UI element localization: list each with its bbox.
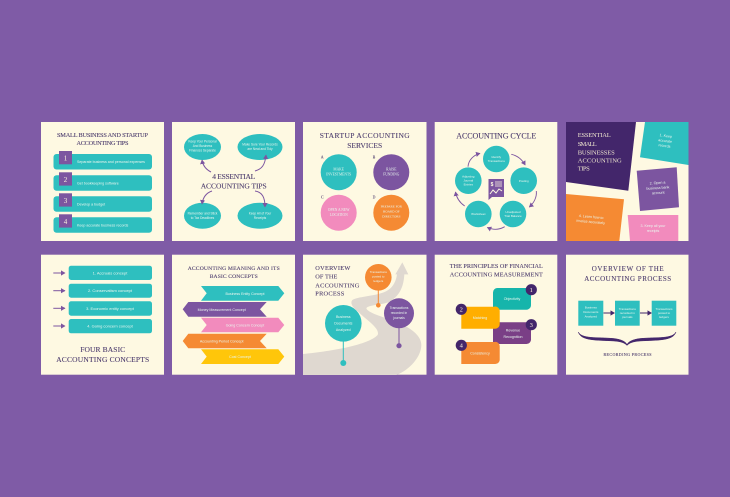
step: posting: Posting [519, 179, 529, 183]
principle 4: consistency: 4 [460, 343, 464, 350]
heading: overview process [584, 265, 671, 283]
concept 1: 1. Accruals concept [93, 270, 128, 276]
service A: MAKE [333, 168, 345, 172]
service A: A [321, 156, 324, 160]
ellipse: keep personal and business finances separate: And Business [193, 144, 213, 148]
pin: business documents analyzed: Business [336, 315, 351, 319]
heading: principles: THE PRINCIPLES OF FINANCIAL [450, 263, 543, 270]
heading: overview process: ACCOUNTING PROCESS [584, 275, 671, 283]
panel: four basic accounting concepts [41, 255, 164, 375]
step: worksheet: Worksheet [471, 212, 486, 216]
service C: OPEN A NEW [328, 208, 350, 212]
principle 3: revenue recognition [493, 319, 537, 344]
service C: C [321, 196, 324, 200]
heading: accounting cycle: ACCOUNTING CYCLE [456, 132, 536, 140]
tip 2: 2 [64, 176, 68, 184]
service D: PREPARE FOR [381, 204, 403, 208]
principle 4: consistency: Consistency [470, 352, 490, 356]
service B: RAISE [386, 168, 397, 172]
block: open a business bank account: account [652, 191, 665, 195]
block: learn how to invoice accurately: invoice accurately [576, 219, 605, 225]
arrow: business entity concept: Business Entity Concept [226, 292, 264, 296]
block: keep accurate records [640, 122, 688, 165]
ellipse: keep personal and business finances separate [184, 134, 221, 160]
heading: meaning and concepts [188, 266, 280, 280]
step: identify transactions [483, 146, 510, 172]
tip 1: 1 [64, 154, 68, 162]
tip 3: 3 [64, 197, 68, 205]
panel: overview of the accounting process road [303, 255, 426, 375]
tip 3 [54, 193, 152, 212]
box: transactions recorded in journals: journals [621, 315, 633, 319]
principle 3: revenue recognition: 3 [530, 322, 533, 329]
block: open a business bank account [637, 167, 679, 211]
tip 1 [54, 151, 152, 170]
box: transactions posted to ledgers: ledgers [659, 315, 669, 319]
ellipse: records are neat and tidy: Make Sure Your Records [242, 142, 278, 146]
heading: startup services: STARTUP ACCOUNTING [320, 131, 410, 140]
pin: business documents analyzed: Analyzed [336, 328, 351, 332]
service B: FUNDING [383, 172, 400, 176]
block: learn how to invoice accurately: 4. Learn how to [579, 214, 604, 220]
box: business documents analyzed [578, 301, 603, 326]
tip 3: Develop a budget [77, 202, 105, 206]
tip 4: 4 [64, 218, 68, 226]
principle 3: revenue recognition: Recognition [504, 335, 522, 339]
principle 3: revenue recognition: Revenue [506, 328, 520, 332]
pin: transactions posted to ledgers [365, 264, 392, 308]
step: adjusting journal entries: Journal [463, 178, 474, 182]
pin: transactions posted to ledgers: posted to [372, 274, 385, 278]
pin: business documents analyzed: Documents [334, 322, 353, 326]
heading: principles: ACCOUNTING MEASUREMENT [450, 272, 543, 278]
step: identify transactions: Identify [491, 155, 502, 159]
heading: meaning and concepts: BASIC CONCEPTS [210, 274, 258, 280]
block: title: TIPS [578, 166, 590, 172]
service D: DIRECTORS [382, 214, 401, 218]
block: keep accurate records: 1. Keep [659, 133, 672, 139]
panel: essential small businesses accounting tips [566, 122, 688, 241]
heading: four basic concepts: ACCOUNTING CONCEPTS [56, 355, 149, 364]
heading: overview [315, 265, 360, 298]
box: transactions posted to ledgers: Transactions [655, 307, 673, 311]
principle 2: matching [456, 304, 500, 329]
heading: overview: PROCESS [315, 291, 345, 298]
pin: transactions recorded in journals: recorded in [391, 311, 407, 315]
box: business documents analyzed: Documents [583, 310, 599, 314]
step: identify transactions: Transactions [488, 159, 505, 163]
pin: transactions posted to ledgers: Transactions [370, 270, 387, 274]
block: keep accurate records: records [658, 143, 671, 149]
principle 4: consistency [456, 340, 500, 364]
block: title: ESSENTIAL [578, 132, 611, 139]
arrows [53, 273, 65, 326]
block: keep accurate records: accurate [658, 138, 672, 144]
arrow: cost concept: Cost Concept [229, 355, 251, 359]
tip 2 [54, 172, 152, 191]
principle 2: matching: Matching [473, 316, 487, 320]
service B [373, 154, 409, 190]
block: open a business bank account: business bank [646, 185, 670, 191]
step: adjusting journal entries: Adjusting [462, 174, 475, 178]
heading: small business tips [57, 132, 148, 147]
heading: small business tips: SMALL BUSINESS AND STARTUP [57, 132, 148, 139]
arrow: going concern concept: Going Concern Concept [226, 324, 264, 328]
principle 1: objectivity: 1 [530, 287, 533, 294]
block: title: BUSINESSES [578, 150, 615, 156]
principle 1: objectivity [493, 284, 537, 310]
block: title [566, 122, 636, 191]
arrow: accounting period concept: Accounting Period Concept [200, 340, 243, 344]
heading: startup services [320, 131, 410, 150]
ellipse: records are neat and tidy [238, 134, 282, 160]
concept 2: 2. Conservatism concept [88, 288, 133, 293]
principle 1: objectivity: Objectivity [504, 297, 520, 301]
block: title: ACCOUNTING [578, 158, 622, 165]
panel: accounting cycle [435, 122, 557, 241]
box: business documents analyzed: Analyzed [585, 314, 597, 318]
panel: accounting meaning and basic concepts [172, 255, 295, 375]
pin: transactions posted to ledgers: ledgers [373, 279, 384, 283]
service B: B [373, 156, 376, 160]
box: transactions recorded in journals: recorded in [620, 311, 635, 315]
ellipse: keep all of your receipts: Receipts [254, 216, 267, 220]
service C [321, 195, 357, 231]
heading: four basic concepts: FOUR BASIC [80, 345, 125, 354]
arrows [604, 312, 651, 314]
box: business documents analyzed: Business [585, 306, 597, 310]
block: learn how to invoice accurately [566, 194, 624, 241]
block: title: SMALL [578, 141, 597, 148]
service A [321, 154, 357, 190]
box: transactions recorded in journals [615, 301, 640, 326]
panel: 4 essential accounting tips [172, 122, 295, 241]
box: transactions posted to ledgers [652, 301, 676, 326]
brace [578, 332, 676, 346]
heading: overview: OF THE [315, 274, 337, 281]
concept 4: 4. Going concern concept [87, 324, 134, 329]
pin: transactions recorded in journals [384, 298, 414, 348]
service D: D [373, 196, 376, 200]
heading: overview: OVERVIEW [315, 265, 350, 272]
block: keep all your receipts: 3. Keep all your [641, 224, 666, 228]
block: keep all your receipts [628, 215, 678, 241]
service D: BOARD OF [383, 210, 400, 214]
road with arrow [303, 262, 421, 375]
label: recording process: RECORDING PROCESS [604, 352, 652, 357]
tip 4: Keep accurate business records [77, 223, 129, 227]
ellipse: remember and stick to tax deadlines: to Tax Deadlines [191, 216, 215, 220]
service D [373, 195, 409, 231]
principle 2: matching: 2 [460, 307, 463, 314]
step: adjusting journal entries: Entries [464, 182, 473, 186]
ellipse: keep personal and business finances separate: Keep Your Personal [188, 140, 217, 144]
ellipse: keep personal and business finances separate: Finances Separate [189, 148, 216, 152]
heading: four basic concepts [56, 345, 149, 364]
step: unadjusted trial balance [500, 201, 526, 227]
heading: overview process: OVERVIEW OF THE [592, 265, 664, 273]
block: keep all your receipts: receipts [647, 229, 659, 233]
tip 1: Separate business and personal expenses [77, 160, 145, 164]
heading: 4 essential tips: 4 ESSENTIAL [212, 172, 256, 181]
service A: INVESTMENTS [326, 172, 351, 176]
ellipse: keep all of your receipts [238, 203, 282, 229]
ellipse: records are neat and tidy: are Neat and Tidy [247, 147, 273, 151]
heading: startup services: SERVICES [347, 141, 382, 150]
concept 3: 3. Economic entity concept [86, 306, 135, 311]
panel: overview of the accounting process flow [566, 255, 688, 375]
step: unadjusted trial balance: Unadjusted [505, 210, 521, 214]
ellipse: keep all of your receipts: Keep All of Your [249, 212, 272, 216]
ellipse: remember and stick to tax deadlines: Remember and Stick [188, 212, 218, 216]
tip 4 [54, 214, 152, 233]
heading: principles [450, 263, 543, 278]
icon: financial document: $ [491, 182, 494, 188]
cycle arrows [456, 153, 536, 229]
panel: principles of financial accounting measurement [435, 255, 557, 375]
panel: startup accounting services [303, 122, 426, 241]
tip 2: Get bookkeeping software [77, 181, 119, 185]
service C: LOCATION [330, 213, 348, 217]
arrows [202, 155, 266, 207]
box: transactions posted to ledgers: posted to [658, 311, 671, 315]
block: open a business bank account: 2. Open a [650, 180, 666, 186]
box: transactions recorded in journals: Transactions [619, 307, 636, 311]
heading: 4 essential tips [201, 172, 267, 190]
pin: business documents analyzed [325, 305, 362, 366]
arrow: money measurement concept: Money Measurement Concept [198, 308, 246, 312]
step: unadjusted trial balance: Trial Balance [504, 214, 522, 218]
heading: meaning and concepts: ACCOUNTING MEANING AND ITS [188, 266, 280, 272]
step: adjusting journal entries [455, 167, 482, 194]
pin: transactions recorded in journals: journals [392, 316, 405, 320]
heading: overview: ACCOUNTING [315, 282, 360, 289]
panel: small business and startup accounting tips [41, 122, 164, 241]
ellipse: remember and stick to tax deadlines [184, 203, 221, 229]
pin: transactions recorded in journals: Transactions [390, 306, 409, 310]
heading: small business tips: ACCOUNTING TIPS [76, 140, 129, 147]
heading: 4 essential tips: ACCOUNTING TIPS [201, 182, 267, 190]
